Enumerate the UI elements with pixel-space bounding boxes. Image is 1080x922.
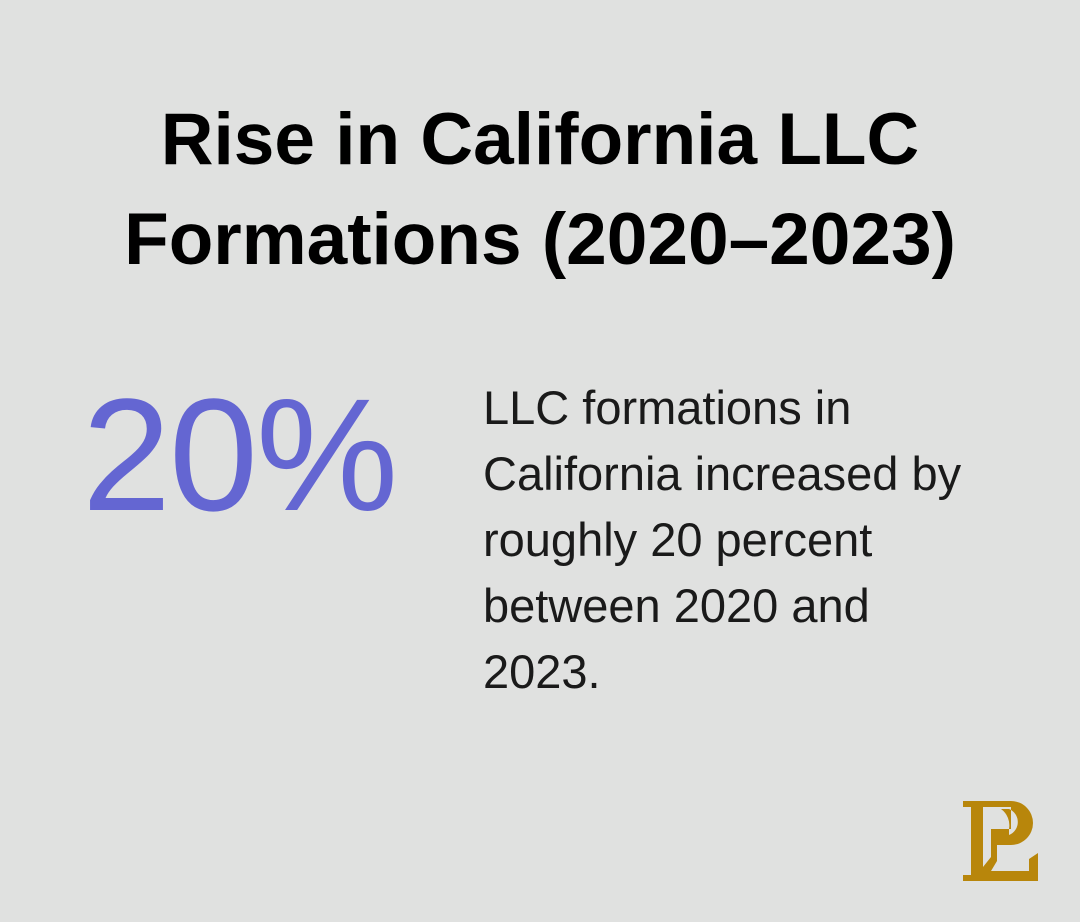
title: [124, 99, 956, 280]
description text: 2023.: [483, 645, 601, 698]
title: Formations (2020–2023): [124, 199, 956, 280]
title: Rise in California LLC: [161, 99, 919, 180]
description text: between 2020 and: [483, 579, 870, 632]
description text: roughly 20 percent: [483, 513, 872, 566]
big stat: 20%: [82, 365, 396, 544]
description text: California increased by: [483, 447, 961, 500]
description text: LLC formations in: [483, 381, 851, 434]
description text: [483, 381, 961, 698]
icon: logo: [963, 801, 1038, 881]
